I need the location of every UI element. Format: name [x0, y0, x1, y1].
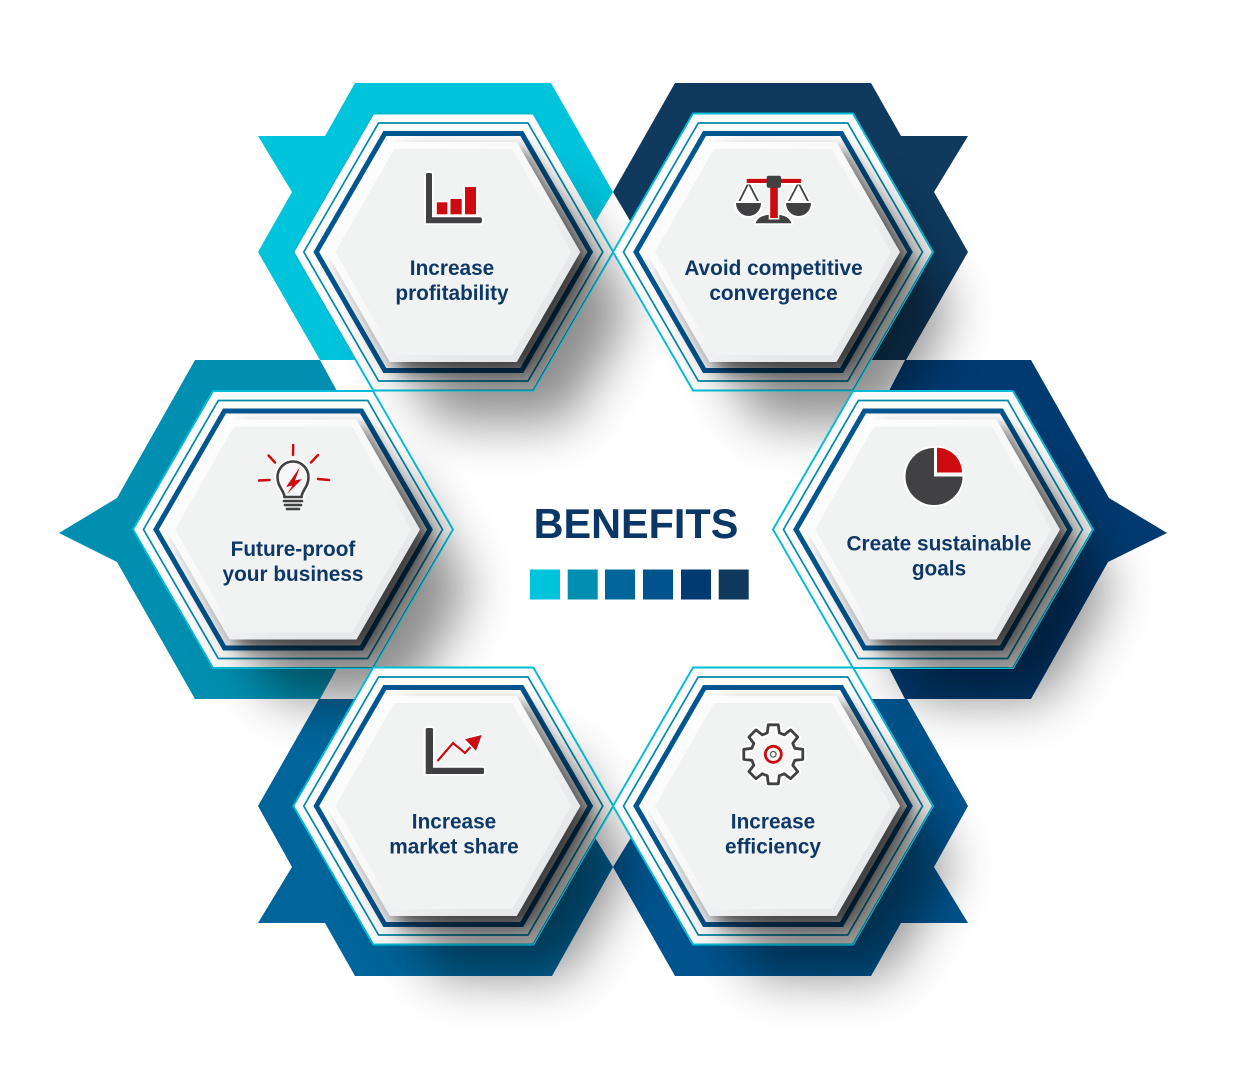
panel: Increase market share: [293, 668, 630, 976]
backing shape: blue hexagon lower right: [613, 699, 968, 976]
label: Increase: [410, 257, 494, 280]
label: market share: [389, 836, 519, 858]
hexagon frame: [613, 668, 950, 976]
label: Avoid competitive: [684, 257, 863, 280]
backing shape: cyan hexagon: [258, 83, 613, 360]
label: profitability: [395, 282, 509, 305]
hexagon frame: [293, 668, 630, 976]
label: goals: [912, 558, 966, 580]
hexagon frame: [293, 114, 630, 422]
label: Increase: [412, 810, 496, 834]
label: convergence: [709, 282, 838, 305]
hexagon frame: [613, 114, 950, 422]
backing shape: blue hexagon lower left: [258, 699, 613, 976]
colour key squares: [530, 570, 749, 600]
title: BENEFITS: [534, 501, 738, 547]
panel: Increase efficiency: [613, 668, 950, 976]
hexagon frame: [773, 391, 1110, 700]
soft drop shadows: [216, 202, 1110, 976]
panel: Increase profitability: [293, 114, 630, 422]
icon: bar chart: [426, 173, 482, 223]
icon: balance scales: [736, 176, 811, 223]
backing shape: teal hexagon with left arrow tip: [59, 360, 380, 699]
icon: rising line chart: [426, 728, 484, 774]
backing shape: deep blue hexagon with right arrow tip: [860, 360, 1167, 699]
label: Create sustainable: [847, 532, 1031, 556]
hexagon frame: [133, 391, 470, 700]
panel: Avoid competitive convergence: [613, 114, 950, 422]
icon: light bulb: [259, 445, 329, 509]
icon: pie chart: [906, 448, 962, 505]
panel: Future-proof your business: [133, 391, 470, 700]
icon: gear: [744, 725, 803, 784]
label: Increase: [731, 810, 815, 834]
label: Future-proof: [231, 538, 355, 561]
label: efficiency: [725, 836, 821, 858]
label: your business: [222, 563, 364, 586]
backing shape: navy hexagon: [613, 83, 968, 360]
panel: Create sustainable goals: [773, 391, 1110, 700]
